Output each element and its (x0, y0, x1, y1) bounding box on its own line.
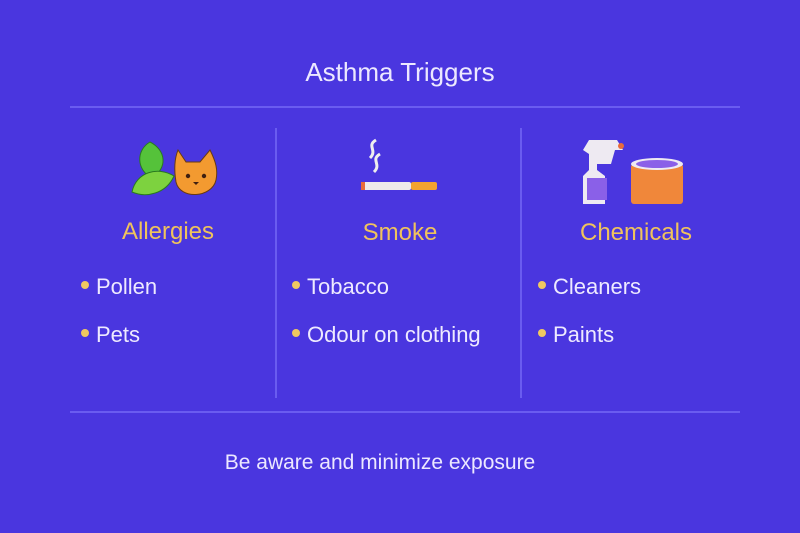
list: allergies: Pollen (96, 274, 157, 299)
list: chemicals (538, 274, 641, 347)
icon: leaf and cat (131, 141, 218, 196)
list: smoke: Odour on clothing (307, 322, 481, 347)
icon: spray bottle and paint can (583, 140, 683, 204)
heading: Smoke: Smoke (363, 219, 437, 246)
list: allergies: Pets (96, 322, 140, 347)
icon: cigarette (361, 138, 437, 190)
list: smoke: Tobacco (307, 274, 389, 299)
heading: Chemicals: Chemicals (580, 219, 692, 246)
list: chemicals: Paints (553, 322, 614, 347)
list: smoke (292, 274, 481, 347)
heading: Allergies: Allergies (122, 218, 214, 245)
footer message: Be aware and minimize exposure (225, 451, 535, 474)
list: chemicals: Cleaners (553, 274, 641, 299)
list: allergies (81, 274, 157, 347)
title: Asthma Triggers (305, 57, 495, 87)
